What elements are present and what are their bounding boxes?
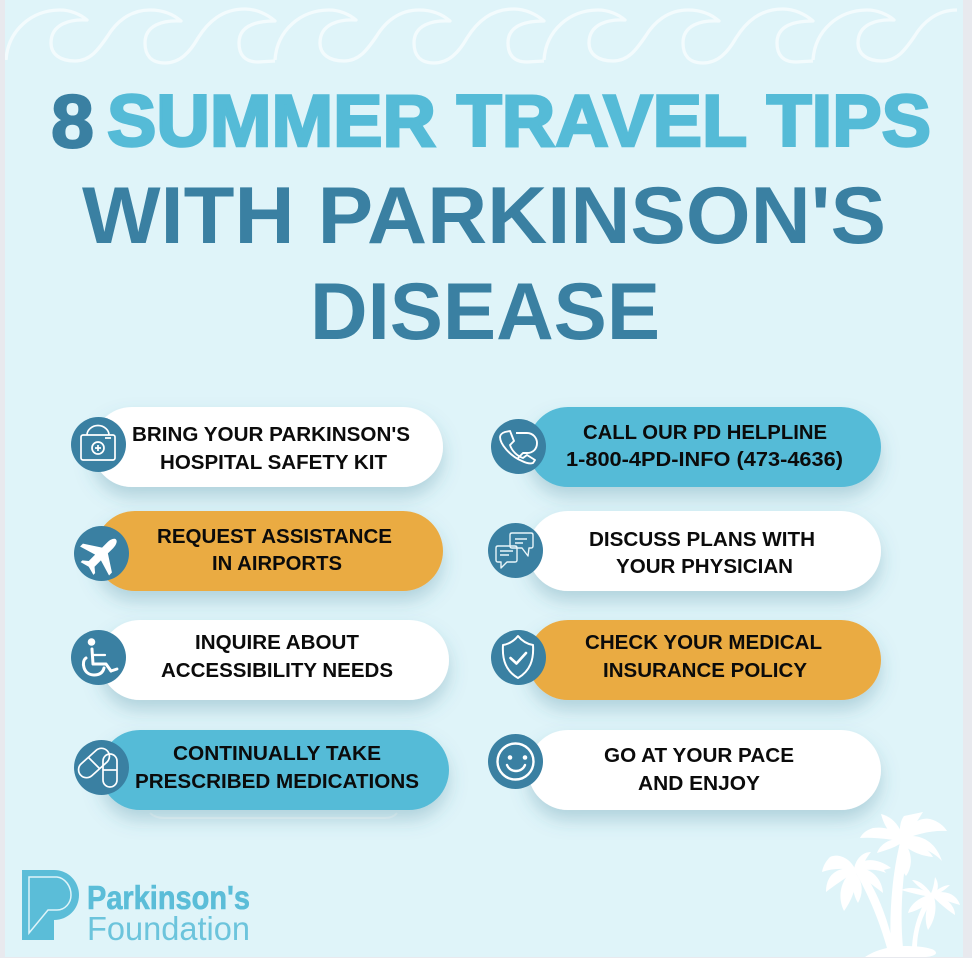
title: DISEASE — [310, 267, 660, 357]
tip: medications: PRESCRIBED MEDICATIONS — [135, 771, 419, 793]
icon: smiley — [488, 734, 543, 789]
faint card edge under pill 4 — [150, 813, 397, 818]
tip: hospital safety kit — [71, 407, 443, 487]
icon: capsules — [74, 740, 129, 795]
tip: accessibility: INQUIRE ABOUT — [195, 632, 359, 654]
logo: Parkinson's Foundation: Parkinson's — [87, 879, 250, 916]
title: WITH PARKINSON'S — [82, 171, 886, 261]
icon: medical kit — [71, 417, 126, 472]
tip: go at your pace: AND ENJOY — [638, 773, 761, 795]
tip: hospital safety kit: HOSPITAL SAFETY KIT — [160, 452, 387, 474]
tip: go at your pace — [488, 730, 881, 810]
icon: airplane — [73, 525, 130, 583]
tip: insurance: CHECK YOUR MEDICAL — [585, 632, 822, 654]
tip: discuss plans: YOUR PHYSICIAN — [616, 556, 793, 578]
tip: medications — [74, 730, 449, 810]
tip: accessibility: ACCESSIBILITY NEEDS — [161, 660, 393, 682]
title: SUMMER TRAVEL TIPS — [107, 81, 931, 162]
tip: go at your pace: GO AT YOUR PACE — [604, 745, 794, 767]
tip: request assistance: REQUEST ASSISTANCE — [157, 526, 392, 548]
tip: discuss plans — [488, 511, 881, 591]
tip: hospital safety kit: BRING YOUR PARKINSON'S — [132, 424, 410, 446]
palm trees — [822, 812, 960, 957]
title — [51, 80, 931, 357]
title: 8 — [51, 80, 94, 164]
icon: shield check — [491, 630, 546, 685]
icon: chat bubbles — [488, 523, 543, 578]
tip: insurance — [491, 620, 881, 700]
tip: helpline — [491, 407, 881, 487]
logo: Parkinson's Foundation — [22, 870, 250, 947]
tip: accessibility — [71, 620, 449, 700]
icon: wheelchair — [71, 630, 126, 685]
tip: request assistance — [73, 511, 443, 591]
logo: Parkinson's Foundation: Foundation — [87, 910, 250, 947]
tip: helpline: CALL OUR PD HELPLINE — [583, 422, 827, 444]
tip: insurance: INSURANCE POLICY — [603, 660, 808, 682]
icon: phone and P bubble — [491, 419, 546, 474]
tip: helpline: 1-800-4PD-INFO (473-4636) — [566, 449, 843, 471]
wave border — [6, 9, 957, 63]
tip: medications: CONTINUALLY TAKE — [173, 743, 381, 765]
tip: discuss plans: DISCUSS PLANS WITH — [589, 529, 815, 551]
logo mark — [22, 870, 79, 940]
tip: request assistance: IN AIRPORTS — [212, 553, 342, 575]
